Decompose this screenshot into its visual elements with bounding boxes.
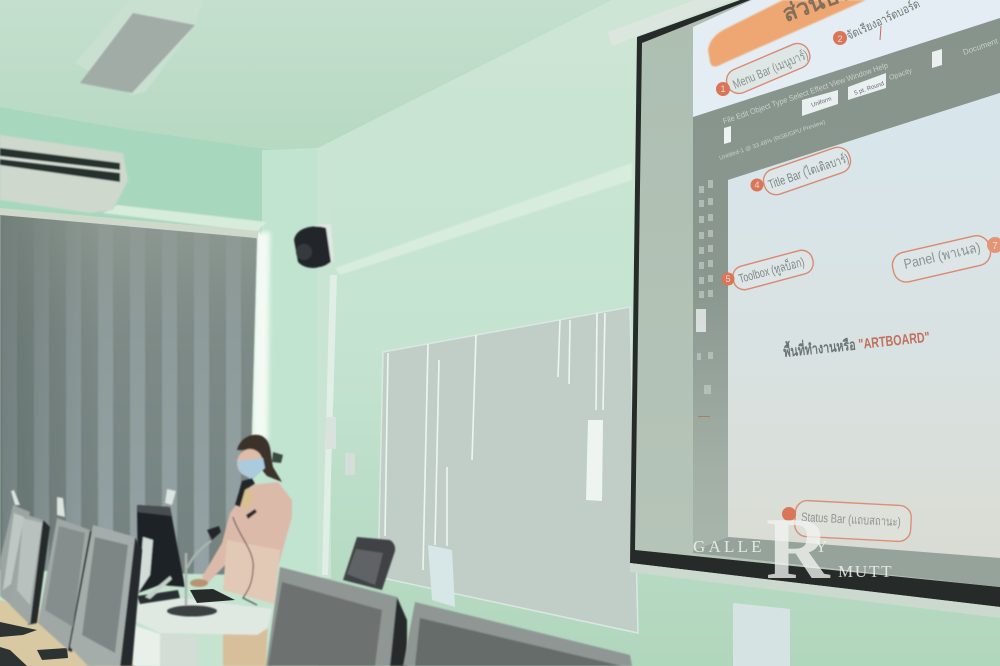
face: [237, 449, 263, 477]
callout: Status Bar: [782, 500, 912, 542]
window light strip: [252, 232, 270, 440]
column front face: [317, 148, 331, 578]
control bar white fields: [719, 29, 1000, 162]
callout: 7 Panel: [890, 233, 1000, 285]
callout: 5 Toolbox: Toolbox (ทูลบ็อก): [737, 253, 806, 286]
lectern keyboard: [190, 589, 235, 603]
microphone: [235, 478, 255, 507]
control bar white fields: Uniform: [811, 96, 833, 109]
vertical blinds: [0, 212, 257, 575]
hair bow: [272, 452, 283, 463]
screen lower white strip: [630, 563, 1000, 618]
stands on top of monitors: [57, 497, 65, 517]
application toolbars band: [693, 18, 1000, 552]
wall conduit pipe: [322, 275, 337, 575]
monitor 1: [0, 505, 30, 606]
left row monitors: [0, 489, 176, 666]
whiteboard: [378, 307, 638, 633]
screen grey margin: [635, 0, 1000, 587]
wall column beside the window: [262, 150, 320, 580]
back wall above the blinds: [0, 107, 272, 240]
control bar white fields: 5 pt. Round: [854, 81, 885, 97]
projected slide background: [693, 0, 1000, 180]
whiteboard window reflections: [385, 313, 605, 570]
hand on keyboard: [190, 579, 208, 587]
artboard caption: พื้นที่ทำงานหรือ "ARTBOARD": [782, 326, 931, 360]
projection screen: [630, 0, 1000, 618]
paper note on the wall below the board: [428, 545, 455, 607]
microphone hand: [238, 486, 252, 508]
microphone cable: [233, 517, 257, 605]
callout: 7 Panel: 7: [992, 241, 998, 252]
callout: 1 Menu Bar: [716, 40, 814, 97]
face mask: [237, 458, 265, 480]
window lintel: [103, 205, 267, 232]
control bar white fields: Opacity: [888, 67, 914, 82]
foreground monitor right: [403, 602, 632, 666]
paper note under the screen: [733, 603, 790, 666]
wall rail ledge: [335, 163, 632, 275]
watermark: Gallery RMUTT: Y: [815, 537, 827, 556]
watermark: Gallery RMUTT: R: [766, 501, 831, 598]
presenter: [190, 435, 292, 666]
watermark: Gallery RMUTT: [693, 501, 893, 598]
callout: 4 Title Bar: Title Bar (ไตเติลบาร์): [766, 151, 851, 192]
legs: [223, 620, 268, 666]
monitor 2: [10, 515, 50, 625]
ceiling: [0, 0, 612, 150]
callout: 2 align artboards: 2: [837, 34, 843, 44]
ceiling light fixture: [75, 0, 203, 95]
callout: 4 Title Bar: 4: [754, 180, 760, 190]
monitor 4: [70, 525, 142, 666]
callout: 5 Toolbox: [722, 248, 816, 292]
watermark: Gallery RMUTT: MUTT: [838, 562, 893, 581]
gooseneck microphone: [167, 526, 221, 616]
white lectern desk: [133, 598, 272, 666]
callout: 5 Toolbox: 5: [725, 274, 731, 284]
light switch: [345, 453, 355, 475]
callout: 7 Panel: Panel (พาเนล): [902, 239, 982, 272]
status bar band: [693, 537, 1000, 587]
monitor 3: [38, 518, 93, 652]
callout: 4 Title Bar: [750, 144, 854, 198]
chair: [343, 537, 395, 590]
classroom desk: [0, 600, 135, 666]
orange slide banner: [708, 0, 905, 67]
projector housing: [608, 0, 732, 46]
menu bar items: File Edit Object Type Select Effect View Window Help: [722, 60, 889, 126]
watch: [246, 509, 257, 519]
air conditioner: [0, 135, 128, 213]
hair: [237, 435, 282, 482]
watermark: Gallery RMUTT: GALLE: [693, 537, 765, 556]
wall outlet box: [326, 417, 336, 449]
dress: [202, 482, 292, 604]
speaker: [294, 224, 334, 268]
screen black frame: [630, 0, 1000, 607]
callout: Status Bar: Status Bar (แถบสถานะ): [801, 511, 901, 530]
desk keyboards: [0, 622, 68, 666]
foreground monitor left: [266, 567, 407, 666]
right wall: [318, 0, 1000, 666]
lectern monitor: [137, 505, 185, 604]
control bar white fields: Untitled-1 @ 33.48% (RGB/GPU Preview): [719, 120, 826, 162]
blinds top rail: [0, 208, 258, 238]
callout: 1 Menu Bar: 1: [720, 84, 726, 94]
toolbox icons: [696, 180, 713, 417]
artboard work area: [728, 93, 1000, 558]
callout: 1 Menu Bar: Menu Bar (เมนูบาร์): [731, 47, 810, 92]
